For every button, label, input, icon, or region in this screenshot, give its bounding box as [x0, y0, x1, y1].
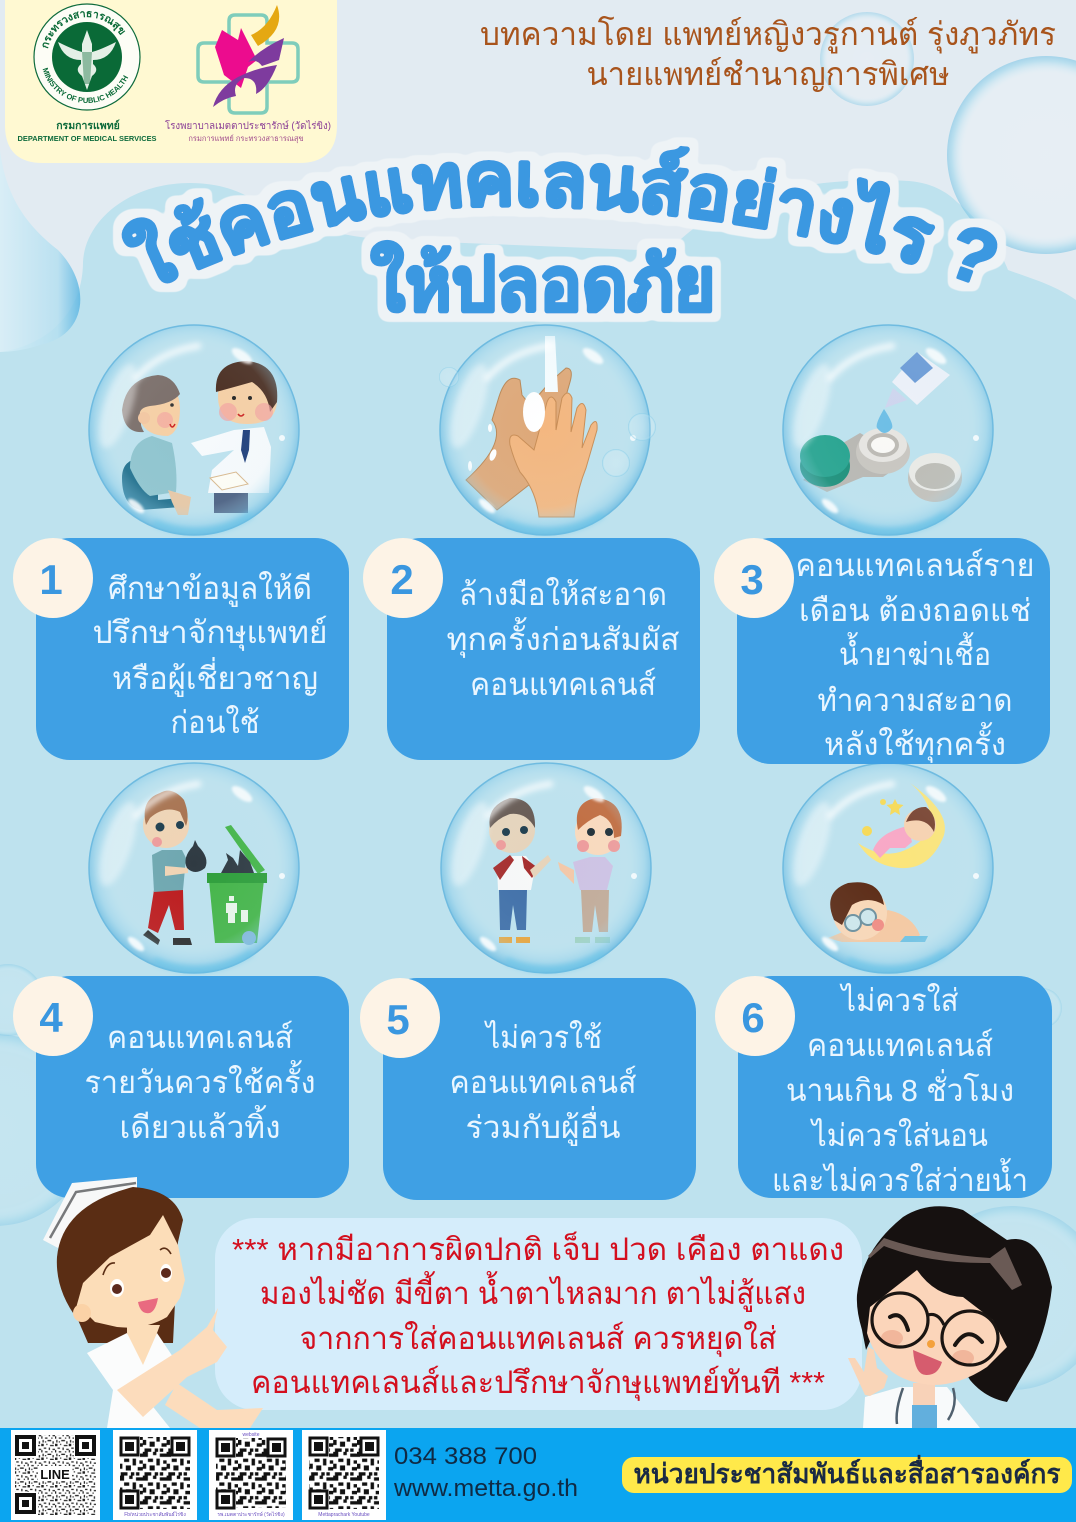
hair	[857, 1206, 1052, 1402]
warning box: จากการใส่คอนแทคเลนส์ ควรหยุดใส่	[300, 1321, 777, 1358]
qr code facebook: Fb/หน่วยประชาสัมพันธ์ไร่ขิง	[124, 1511, 186, 1518]
author credit: บทความโดย แพทย์หญิงวรูกานต์ รุ่งภูวภัทร	[480, 16, 1056, 54]
face	[867, 1270, 1007, 1385]
card 5	[360, 978, 696, 1200]
pointing arm	[117, 1308, 227, 1417]
glasses	[872, 1293, 998, 1365]
card 2 text	[446, 577, 680, 702]
bubble	[89, 763, 299, 973]
decorative bubble right middle	[1022, 988, 1062, 1028]
decorative bubble lower right	[920, 1206, 1076, 1390]
badge 5	[360, 978, 440, 1058]
badge 1: 1	[39, 556, 63, 603]
swimmer	[828, 882, 928, 942]
card 6 text: ไม่ควรใส่	[839, 983, 959, 1018]
logo: ministry of public health: กระทรวงสาธารณสุข	[42, 11, 126, 48]
nurse illustration	[43, 1177, 263, 1428]
decorative bubble left middle	[0, 964, 44, 1036]
bubble 3: lens case	[783, 325, 993, 535]
card 6 text: นานเกิน 8 ชั่วโมง	[786, 1069, 1014, 1108]
card 6 text: ไม่ควรใส่นอน	[809, 1118, 988, 1153]
hand front	[510, 393, 597, 517]
water drop left edge	[0, 150, 80, 352]
hair	[57, 1187, 183, 1343]
green lid	[800, 435, 850, 487]
card 3 text: คอนแทคเลนส์ราย	[796, 548, 1034, 583]
logo caption	[18, 119, 156, 143]
qr code youtube: Mettaprachark Youtube	[318, 1512, 370, 1518]
trash bag	[185, 840, 206, 872]
solution bottle	[885, 352, 950, 408]
qr code website	[209, 1430, 293, 1520]
card 1 text	[92, 571, 328, 740]
card 1 text: หรือผู้เชี่ยวชาญ	[112, 657, 318, 697]
card 4 text: คอนแทคเลนส์	[107, 1020, 293, 1055]
bubble	[783, 763, 993, 973]
logo: ministry of public health: MINISTRY OF PUBLIC HEALTH	[42, 68, 128, 103]
card 4 text: เดียวแล้วทิ้ง	[120, 1105, 280, 1145]
bubble 6: no sleeping or swimming in lenses	[783, 763, 993, 973]
ear	[73, 1304, 91, 1322]
decorative bubble top right	[947, 56, 1076, 254]
uniform	[87, 1333, 175, 1428]
bubble	[783, 325, 993, 535]
bubble	[440, 325, 650, 535]
card 2 text: ทุกครั้งก่อนสัมผัส	[446, 617, 680, 659]
card 2	[363, 538, 700, 760]
warning box: *** หากมีอาการผิดปกติ เจ็บ ปวด เคือง ตาแดง	[232, 1231, 844, 1267]
card 6 text: คอนแทคเลนส์	[807, 1028, 993, 1063]
logo caption: กรมการแพทย์	[56, 119, 120, 132]
warning box: มองไม่ชัด มีขี้ตา น้ำตาไหลมาก ตาไม่สู้แสง	[260, 1271, 806, 1312]
qr code line	[11, 1430, 100, 1520]
coat	[863, 1387, 980, 1428]
hand back	[466, 368, 571, 510]
boy left	[489, 798, 551, 943]
badge 3	[714, 538, 794, 618]
card 5 text: คอนแทคเลนส์	[450, 1065, 637, 1100]
card 3 text: น้ำยาฆ่าเชื้อ	[839, 632, 991, 672]
cap stripe	[50, 1183, 136, 1238]
patient	[122, 375, 191, 515]
card 5 text: ร่วมกับผู้อื่น	[466, 1106, 620, 1146]
qr code website: website	[243, 1432, 260, 1438]
lens well	[856, 428, 910, 474]
qr code line: LINE	[40, 1467, 70, 1482]
sleeping baby	[873, 807, 936, 858]
card 4	[13, 976, 349, 1198]
card 3 text: หลังใช้ทุกครั้ง	[824, 722, 1006, 764]
stars	[862, 799, 904, 836]
footer bar	[0, 1428, 1076, 1522]
badge 4: 4	[39, 994, 63, 1041]
card 5 text: ไม่ควรใช้	[483, 1020, 602, 1055]
badge 6	[715, 976, 795, 1056]
footer unit label: หน่วยประชาสัมพันธ์และสื่อสารองค์กร	[634, 1454, 1061, 1489]
author credit: นายแพทย์ชำนาญการพิเศษ	[586, 56, 950, 92]
dish	[908, 453, 962, 502]
card 3 text: ทำความสะอาด	[818, 683, 1012, 718]
cheeks	[881, 1330, 974, 1366]
neck and shirt	[912, 1383, 937, 1428]
card 5 text	[450, 1020, 637, 1146]
logo: metta hospital	[198, 5, 298, 113]
badge 2	[363, 538, 443, 618]
doctor	[191, 361, 277, 513]
green bin	[207, 825, 267, 945]
main title: ให้ปลอดภัย	[370, 241, 716, 326]
card 6	[715, 976, 1052, 1198]
badge 2: 2	[390, 556, 414, 603]
hospital caption: โรงพยาบาลเมตตาประชารักษ์ (วัดไร่ขิง)	[165, 119, 331, 132]
bubble 2: wash hands	[439, 325, 656, 535]
water stream	[545, 336, 558, 392]
mouth	[913, 1350, 942, 1375]
bubble	[441, 763, 651, 973]
card 3	[714, 538, 1050, 764]
nose	[927, 1340, 935, 1348]
logo caption: DEPARTMENT OF MEDICAL SERVICES	[18, 134, 156, 143]
water drops	[468, 424, 498, 471]
nurse cap	[43, 1177, 137, 1248]
main title: ใช้คอนแทคเลนส์อย่างไร ?	[112, 138, 1006, 292]
author credit	[480, 16, 1056, 92]
lower arm	[165, 1383, 263, 1428]
card 3 text: เดือน ต้องถอดแช่	[799, 593, 1031, 628]
contact website: www.metta.go.th	[393, 1475, 578, 1502]
decorative bubble behind heading	[820, 12, 914, 106]
contact phone: 034 388 700	[394, 1443, 537, 1470]
card 6 text: และไม่ควรใส่ว่ายน้ำ	[772, 1158, 1028, 1198]
bubble 4: dispose lens	[89, 763, 299, 973]
badge 6: 6	[741, 994, 765, 1041]
solution drop	[877, 409, 892, 433]
card 2 text: ล้างมือให้สะอาด	[459, 577, 667, 612]
neck	[127, 1325, 160, 1365]
card 1 text: ก่อนใช้	[170, 705, 260, 740]
logo panel	[5, 0, 337, 163]
bubble	[89, 325, 299, 535]
card 4 text	[84, 1020, 316, 1145]
hospital caption: กรมการแพทย์ กระทรวงสาธารณสุข	[188, 134, 304, 143]
badge 1	[13, 538, 93, 618]
card 1	[13, 538, 349, 760]
closed eyes	[890, 1315, 982, 1345]
face	[75, 1215, 185, 1328]
qr code youtube	[302, 1430, 386, 1520]
card 3 text	[796, 548, 1034, 764]
hair shine	[868, 1238, 1022, 1290]
decorative bubble lower left	[0, 1034, 91, 1226]
card 1 text: ศึกษาข้อมูลให้ดี	[108, 571, 312, 607]
bubble 5: do not share	[441, 763, 651, 973]
badge 4	[13, 976, 93, 1056]
mouth	[138, 1298, 158, 1313]
boy right	[558, 798, 622, 943]
boy	[143, 791, 192, 945]
foam	[523, 392, 545, 432]
eyes	[103, 1248, 172, 1297]
qr code website: รพ.เมตตาประชารักษ์ (วัดไร่ขิง)	[217, 1511, 285, 1518]
moon	[858, 783, 945, 868]
warning box	[215, 1218, 862, 1410]
ok hand	[848, 1347, 888, 1396]
hospital caption	[165, 119, 331, 143]
card 6 text	[772, 983, 1028, 1198]
doctor illustration	[848, 1206, 1052, 1428]
badge 3: 3	[740, 556, 764, 603]
card 2 text: คอนแทคเลนส์	[470, 667, 656, 702]
badge 5: 5	[386, 996, 410, 1043]
bubble 1: consult doctor	[89, 325, 299, 535]
warning box: คอนแทคเลนส์และปรึกษาจักษุแพทย์ทันที ***	[251, 1365, 825, 1402]
logo: ministry of public health	[33, 3, 141, 111]
stethoscope	[897, 1388, 955, 1424]
card 1 text: ปรึกษาจักษุแพทย์	[92, 615, 328, 652]
card 4 text: รายวันควรใช้ครั้ง	[84, 1060, 316, 1100]
qr code facebook	[113, 1430, 197, 1520]
case base	[803, 433, 908, 492]
